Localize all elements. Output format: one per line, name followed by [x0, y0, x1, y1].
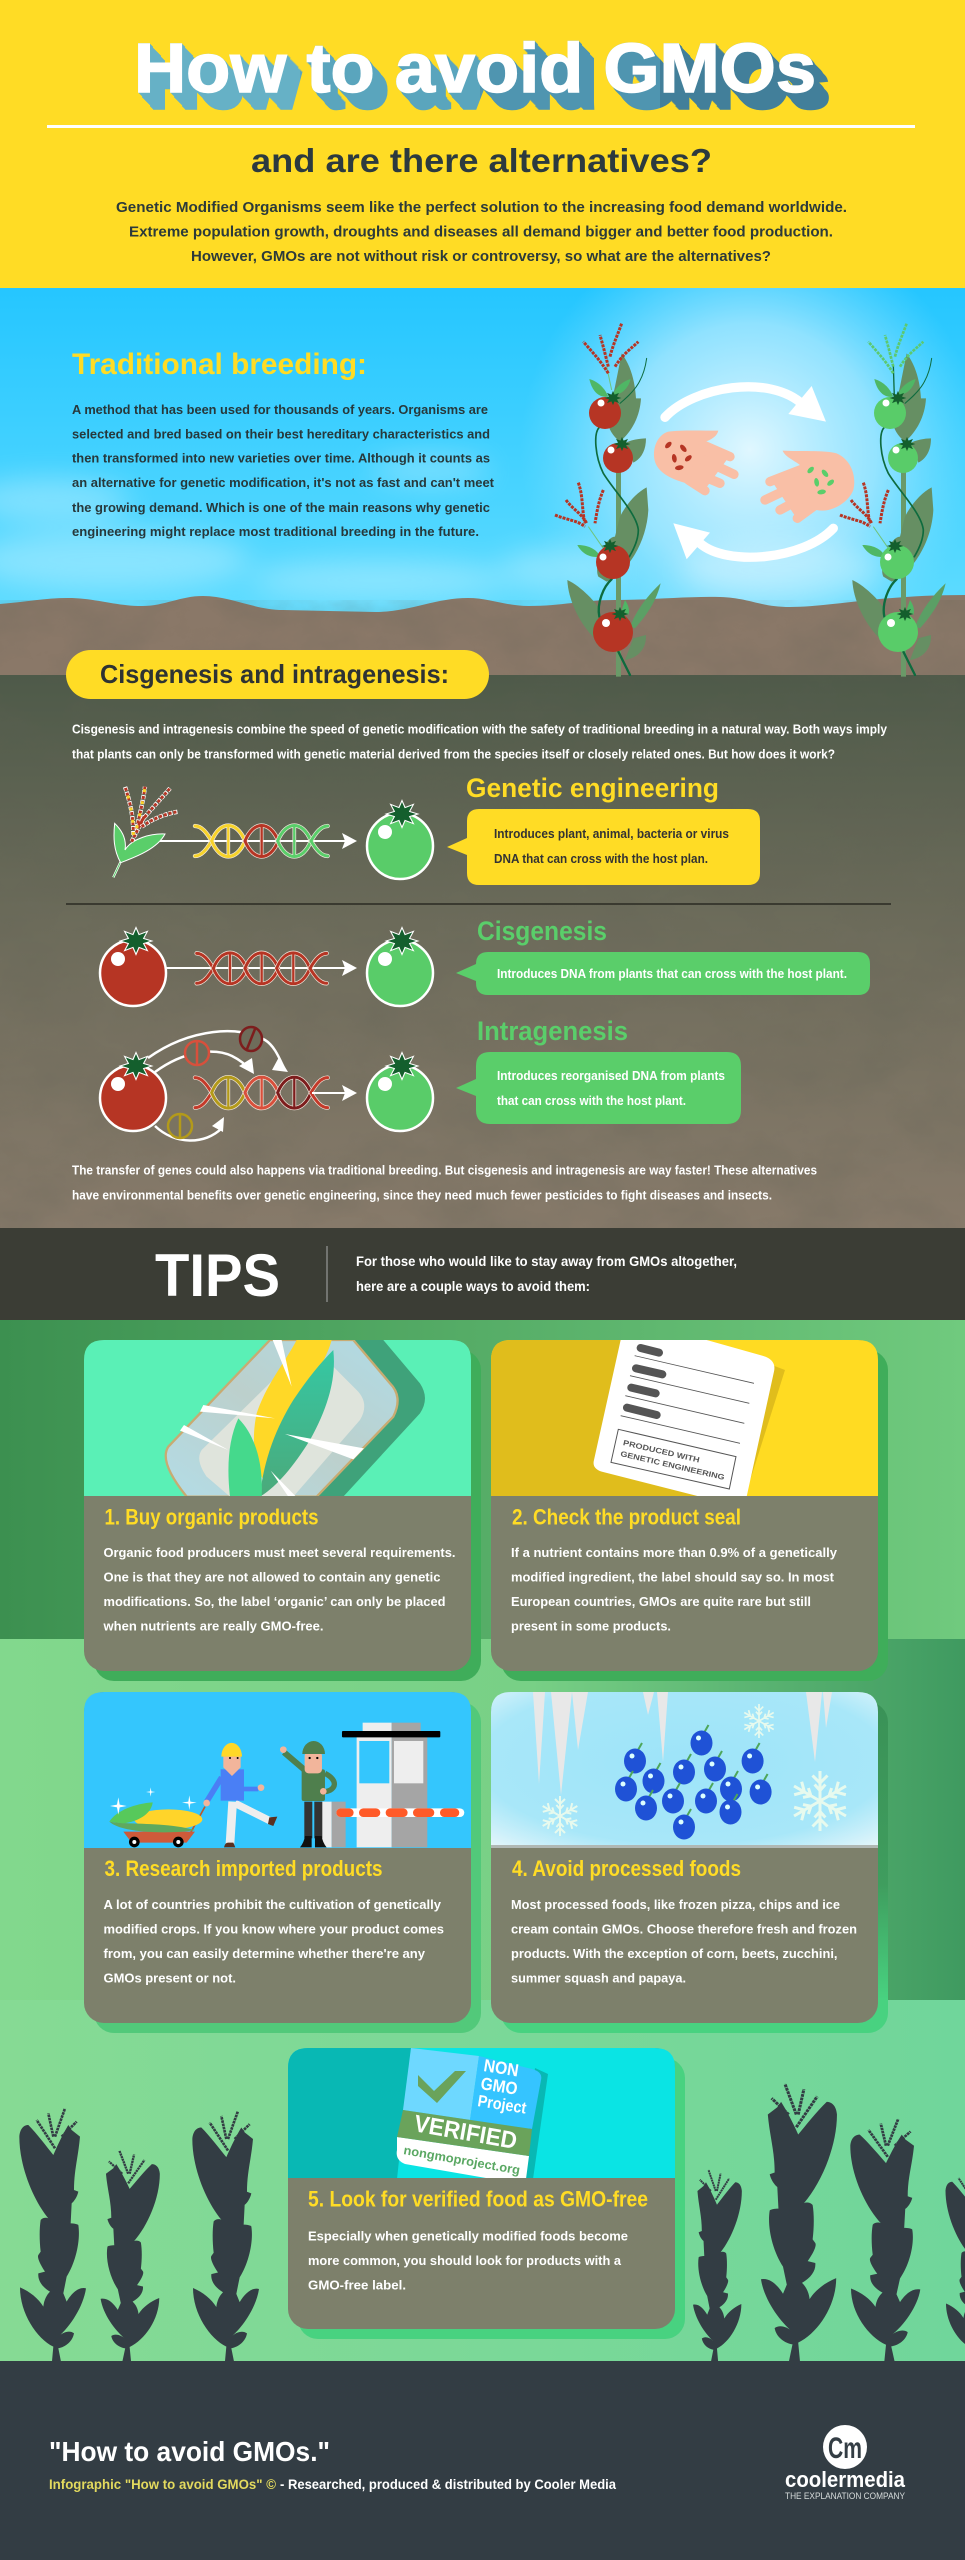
blueberries — [615, 1725, 772, 1840]
band: tips banner: TIPS — [155, 1242, 280, 1309]
illustration: non gmo verified label: NON — [482, 2055, 520, 2080]
icon: right hand with green seeds — [765, 451, 854, 518]
body text: European countries, GMOs are quite rare but still — [511, 1594, 811, 1609]
illustration: border checkpoint — [84, 1692, 471, 1848]
heading: 3. Research imported products — [104, 1856, 382, 1881]
illustration: non gmo verified label: GMO — [479, 2073, 519, 2099]
panel: footer — [0, 2361, 965, 2560]
text block: traditional breeding: engineering might replace most traditional breeding in the future. — [72, 524, 479, 539]
heading: genetic engineering: Genetic engineering — [466, 773, 719, 803]
panel: soil ground — [0, 595, 965, 1229]
intro text: Extreme population growth, droughts and diseases all demand bigger and better food production. — [129, 224, 833, 240]
footer credit: Infographic "How to avoid GMOs" © — [49, 2476, 277, 2492]
band: tips banner: For those who would like to stay away from GMOs altogether, — [356, 1254, 737, 1269]
arrow: bottom — [673, 523, 833, 559]
footer title: "How to avoid GMOs." — [49, 2436, 330, 2467]
body text: If a nutrient contains more than 0.9% of a genetically — [511, 1545, 838, 1560]
icon: flowering plant — [113, 787, 178, 877]
illustration: hands and exchange arrows — [654, 386, 854, 559]
text block: cisgenesis conclusion: The transfer of genes could also happens via traditional breeding. But cisgenesis and intragenesis are way faster! These alternatives — [72, 1162, 817, 1178]
callout: cisgenesis — [456, 952, 870, 995]
arrow: top — [665, 386, 826, 422]
body text: Organic food producers must meet several requirements. — [104, 1545, 456, 1560]
icon: green tomato — [367, 928, 433, 1006]
heading: 2. Check the product seal — [512, 1504, 741, 1530]
text block: traditional breeding: an alternative for genetic modification, it's not as fast and can't meet — [72, 475, 495, 490]
heading pill: cisgenesis and intragenesis — [66, 650, 489, 699]
body text: Most processed foods, like frozen pizza, chips and ice — [511, 1897, 840, 1912]
illustration: non gmo verified label — [288, 2048, 675, 2179]
illustration: frozen blueberries — [491, 1692, 878, 1848]
band: tips banner: here are a couple ways to avoid them: — [356, 1279, 590, 1294]
illustration: non gmo verified label: VERIFIED — [412, 2110, 519, 2155]
panel: sky background with clouds — [0, 288, 965, 618]
body text: Especially when genetically modified foods become — [308, 2228, 628, 2244]
text block: traditional breeding — [72, 402, 495, 539]
panel: header — [0, 0, 965, 288]
text block: traditional breeding: A method that has been used for thousands of years. Organisms are — [72, 402, 488, 417]
illustration: green tomato plant — [840, 323, 946, 677]
arrow — [166, 960, 357, 976]
icon: red tomato — [100, 1053, 166, 1131]
callout: genetic engineering: DNA that can cross with the host plan. — [494, 851, 708, 866]
guard — [280, 1741, 334, 1847]
icon: dna helix — [195, 825, 328, 856]
icon: red tomato — [100, 928, 166, 1006]
heading: traditional breeding: Traditional breeding: — [72, 348, 367, 381]
heading: 1. Buy organic products — [104, 1504, 318, 1530]
logo: coolermedia: THE EXPLANATION COMPANY — [785, 2491, 906, 2502]
icon: green tomato — [367, 1053, 433, 1131]
callout: intragenesis: that can cross with the host plant. — [497, 1093, 686, 1108]
text block: cisgenesis conclusion: have environmental benefits over genetic engineering, since they need much fewer pesticides to fight diseases and insects. — [72, 1188, 772, 1202]
heading pill: cisgenesis and intragenesis: Cisgenesis and intragenesis: — [100, 659, 449, 689]
body text: present in some products. — [511, 1618, 671, 1634]
intro text: However, GMOs are not without risk or controversy, so what are the alternatives? — [191, 249, 771, 265]
snowflakes — [540, 1704, 850, 1836]
booth — [322, 1723, 460, 1847]
heading: intragenesis: Intragenesis — [477, 1016, 628, 1046]
panel: tip 2 check the product seal — [490, 1340, 888, 1681]
body text: cream contain GMOs. Choose therefore fresh and frozen — [511, 1922, 857, 1936]
text block: cisgenesis intro: Cisgenesis and intragenesis combine the speed of genetic modification with the safety of traditional breeding in a natural way. Both ways imply — [72, 722, 888, 736]
text block: traditional breeding: selected and bred based on their best hereditary characteristics and — [72, 426, 490, 442]
body text: when nutrients are really GMO-free. — [102, 1618, 324, 1634]
text block: cisgenesis conclusion — [72, 1162, 817, 1202]
body text — [308, 2228, 628, 2292]
footer credit: - Researched, produced & distributed by Cooler Media — [280, 2476, 616, 2492]
heading: 4. Avoid processed foods — [512, 1856, 741, 1881]
body text: more common, you should look for products with a — [308, 2253, 622, 2268]
panel: tips green background — [0, 1320, 965, 2361]
body text: modifications. So, the label ‘organic’ can only be placed — [104, 1594, 446, 1609]
arrowheads — [212, 1057, 288, 1132]
heading: cisgenesis: Cisgenesis — [477, 916, 607, 946]
arrow — [160, 833, 357, 849]
body text — [511, 1897, 857, 1986]
subtitle: and are there alternatives? — [251, 142, 712, 179]
arrow — [312, 1085, 357, 1101]
panel: tip 5 verified food — [288, 2048, 685, 2339]
icon: green tomato — [367, 801, 433, 879]
body text — [511, 1545, 838, 1634]
body text: summer squash and papaya. — [511, 1970, 686, 1986]
illustration: packaged corn — [84, 1340, 471, 1497]
icons: corn plant silhouettes left — [19, 2108, 259, 2365]
diagram: intragenesis — [100, 1027, 433, 1141]
callout: genetic engineering — [447, 809, 760, 885]
icons: corn plant silhouettes right — [693, 2084, 965, 2363]
body text: modified ingredient, the label should say so. In most — [511, 1570, 835, 1584]
body text: products. With the exception of corn, beets, zucchini, — [511, 1946, 838, 1961]
body text: GMOs present or not. — [104, 1970, 236, 1986]
illustration: non gmo verified label: nongmoproject.org — [402, 2143, 521, 2177]
heading: 5. Look for verified food as GMO-free — [308, 2186, 648, 2212]
diagram: genetic engineering — [113, 787, 433, 879]
body text: GMO-free label. — [308, 2278, 406, 2292]
illustration: red tomato plant — [555, 323, 661, 677]
body text: One is that they are not allowed to contain any genetic — [104, 1570, 440, 1584]
intro text — [116, 200, 847, 265]
logo: coolermedia: coolermedia — [785, 2467, 906, 2492]
icicles — [533, 1692, 832, 1795]
body text — [102, 1545, 456, 1634]
text block: traditional breeding: the growing demand. Which is one of the main reasons why genetic — [72, 500, 490, 515]
text block: traditional breeding: then transformed into new varieties over time. Although it counts as — [72, 450, 490, 466]
intro text: Genetic Modified Organisms seem like the perfect solution to the increasing food demand worldwide. — [116, 200, 847, 216]
callout: intragenesis: Introduces reorganised DNA from plants — [497, 1068, 725, 1083]
body text: A lot of countries prohibit the cultivation of genetically — [104, 1897, 442, 1912]
band: tips banner — [0, 1228, 965, 1320]
logo: coolermedia — [785, 2425, 906, 2502]
panel: tip 3 research imported products — [84, 1692, 481, 2033]
icon: dna helix — [195, 1077, 328, 1108]
footer credit — [49, 2476, 616, 2492]
body text — [104, 1897, 444, 1986]
icons: seeds — [168, 1027, 262, 1138]
panel: tip 4 avoid processed foods — [491, 1692, 888, 2033]
illustration: product label — [490, 1340, 878, 1497]
illustration: product label: GENETIC ENGINEERING — [620, 1449, 726, 1482]
title rule — [47, 125, 915, 128]
title: How to avoid GMOs — [134, 29, 816, 107]
callout: cisgenesis: Introduces DNA from plants that can cross with the host plant. — [497, 966, 847, 981]
text block: cisgenesis intro: that plants can only be transformed with genetic material derived from the species itself or closely related ones. But how does it work? — [72, 746, 835, 762]
text block: cisgenesis intro — [72, 722, 888, 762]
icon: dna helix — [197, 953, 327, 984]
arrows: curved gene transfer — [148, 1031, 284, 1141]
callout: genetic engineering: Introduces plant, animal, bacteria or virus — [494, 826, 729, 841]
body text: from, you can easily determine whether there're any — [104, 1946, 426, 1961]
logo: coolermedia: Cm — [828, 2432, 862, 2465]
illustration: non gmo verified label: Project — [476, 2092, 528, 2118]
illustration: product label: PRODUCED WITH — [622, 1438, 701, 1465]
panel: tip 1 buy organic products — [84, 1340, 481, 1681]
body text: modified crops. If you know where your product comes — [104, 1922, 444, 1936]
icon: left hand with red seeds — [654, 431, 734, 492]
diagram: cisgenesis — [100, 928, 433, 1006]
callout: intragenesis — [456, 1052, 741, 1124]
man with wagon — [109, 1743, 277, 1847]
